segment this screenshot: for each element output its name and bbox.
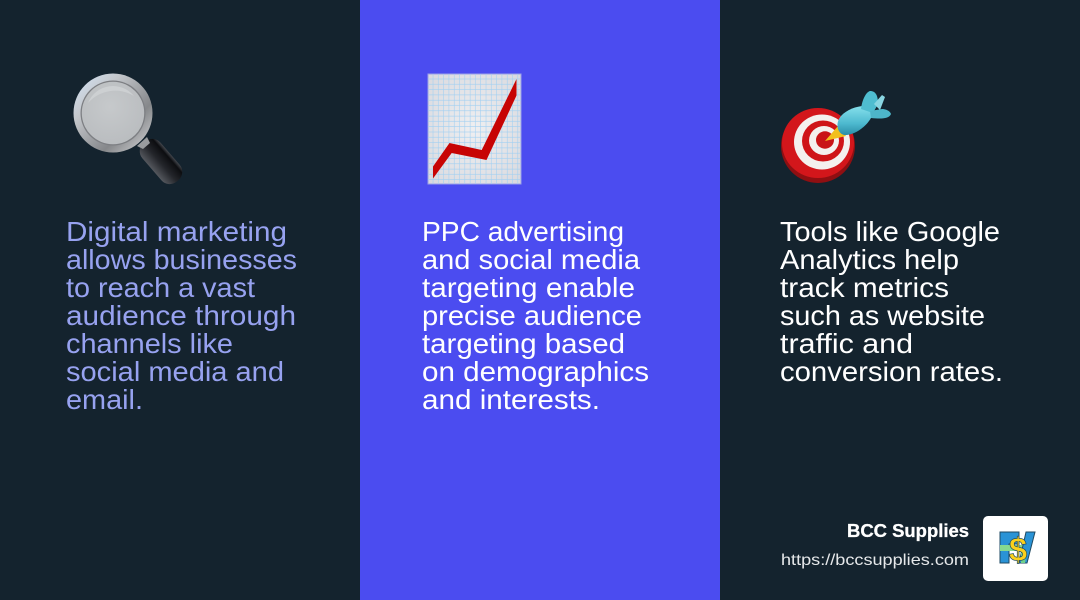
icon: rising chart: [428, 74, 521, 184]
brand name: BCC Supplies: [847, 521, 969, 541]
panel: reach: [0, 0, 360, 600]
text: targeting description: targeting based: [422, 328, 625, 359]
text: analytics description: [780, 216, 1003, 387]
text: targeting description: precise audience: [422, 300, 642, 331]
text: reach description: social media and: [66, 356, 284, 387]
text: analytics description: track metrics: [780, 272, 949, 303]
text: targeting description: and interests.: [422, 384, 600, 415]
text: reach description: audience through: [66, 300, 296, 331]
icon: magnifying glass: [74, 74, 187, 189]
text: targeting description: [422, 216, 649, 415]
brand url: https://bccsupplies.com: [781, 552, 969, 569]
panel: analytics: [720, 0, 1080, 600]
text: targeting description: targeting enable: [422, 272, 635, 303]
text: analytics description: Tools like Google: [780, 216, 1000, 247]
text: analytics description: Analytics help: [780, 244, 959, 275]
text: analytics description: traffic and: [780, 328, 913, 359]
text: targeting description: PPC advertising: [422, 216, 624, 247]
icon: dart and target: [781, 91, 891, 183]
icon: brand logo: $: [1009, 531, 1027, 568]
text: reach description: to reach a vast: [66, 272, 255, 303]
text: targeting description: and social media: [422, 244, 640, 275]
text: reach description: Digital marketing: [66, 216, 287, 247]
text: analytics description: such as website: [780, 300, 985, 331]
text: reach description: allows businesses: [66, 244, 297, 275]
panel: targeting: [360, 0, 720, 600]
text: reach description: [66, 216, 297, 415]
text: targeting description: on demographics: [422, 356, 649, 387]
text: reach description: channels like: [66, 328, 233, 359]
text: analytics description: conversion rates.: [780, 356, 1003, 387]
text: reach description: email.: [66, 384, 143, 415]
icon: brand logo: [983, 516, 1048, 581]
